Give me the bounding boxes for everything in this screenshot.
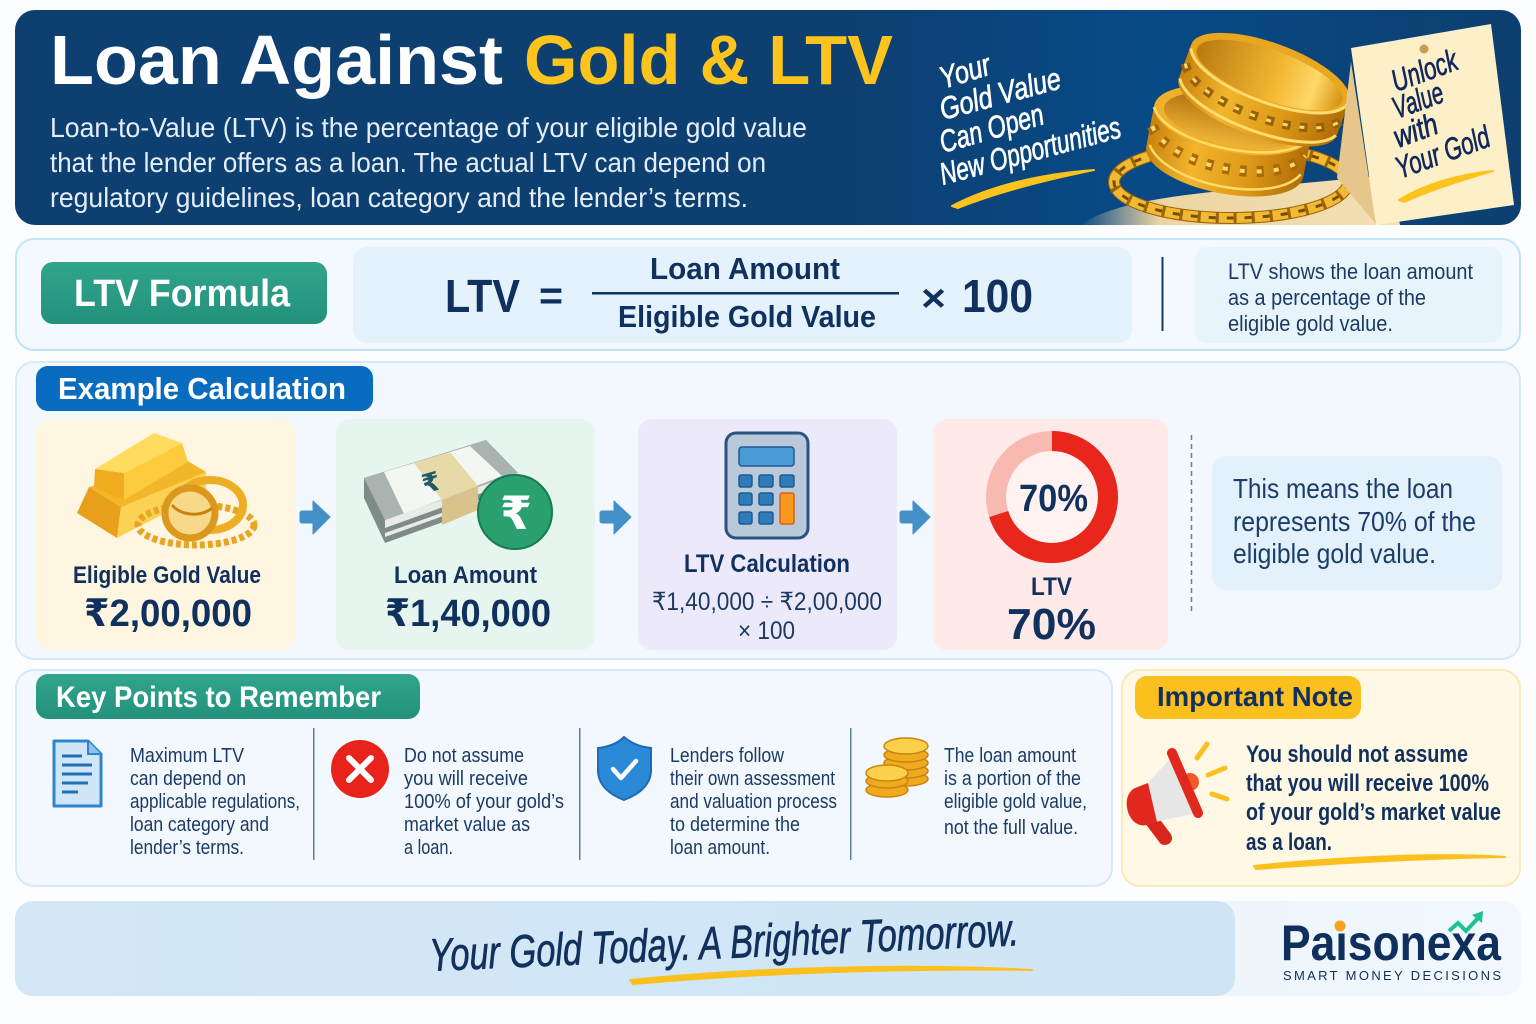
formula equation: Eligible Gold Value <box>618 299 876 334</box>
handwritten tagline: Can Open <box>935 97 1048 160</box>
handwritten tagline: Gold Value <box>936 61 1065 127</box>
panel: key points <box>16 670 1112 886</box>
important note text: as a loan. <box>1246 829 1332 856</box>
header description: that the lender offers as a loan. The actual LTV can depend on <box>50 147 766 178</box>
key point: portion of value <box>866 738 1087 839</box>
card: LTV calculation: LTV Calculation <box>684 550 850 578</box>
key point: portion of value: eligible gold value, <box>944 791 1087 813</box>
donut chart: 70 percent: 70% <box>1019 478 1088 520</box>
sticky note: Value <box>1387 75 1448 126</box>
important note heading <box>1135 676 1361 719</box>
key points heading: Key Points to Remember <box>56 681 381 714</box>
formula explanation <box>1195 247 1502 343</box>
header description: Loan-to-Value (LTV) is the percentage of your eligible gold value <box>50 112 807 143</box>
logo: Paisonexa: SMART MONEY DECISIONS <box>1283 968 1501 983</box>
key point: regulations: can depend on <box>130 768 246 790</box>
icon: megaphone <box>1127 744 1227 838</box>
handwritten tagline <box>935 47 1124 208</box>
panel: important note <box>1122 670 1520 886</box>
key point: lender assessment: Lenders follow <box>670 745 784 767</box>
important note text <box>1246 741 1501 856</box>
card: eligible gold value <box>36 419 295 650</box>
formula equation: × <box>921 278 946 320</box>
card: LTV result: 70% <box>1007 600 1096 649</box>
card: LTV result <box>933 419 1168 650</box>
panel: example calculation <box>16 362 1520 659</box>
card: eligible gold value: Eligible Gold Value <box>73 562 261 589</box>
sticky note: Your Gold <box>1390 119 1496 186</box>
key point: do not assume: a loan. <box>404 837 453 859</box>
example explanation <box>1212 456 1502 590</box>
arrow <box>900 501 930 534</box>
formula explanation: as a percentage of the <box>1228 285 1426 310</box>
key point: regulations: Maximum LTV <box>130 745 245 767</box>
key point: do not assume: you will receive <box>404 768 528 790</box>
title <box>50 21 893 99</box>
key point: lender assessment: and valuation process <box>670 791 837 813</box>
icon: cash stack with rupee coin <box>364 440 552 549</box>
card: loan amount: Loan Amount <box>394 562 537 589</box>
key points heading <box>36 674 420 719</box>
key point: do not assume: Do not assume <box>404 745 524 767</box>
key point: regulations: loan category and <box>130 814 269 836</box>
important note text: that you will receive 100% <box>1246 770 1489 797</box>
icon: cash stack with rupee coin: ₹ <box>500 487 532 539</box>
card: LTV calculation <box>638 419 897 650</box>
example explanation: represents 70% of the <box>1233 506 1476 537</box>
icon: calculator <box>726 433 808 538</box>
card: LTV calculation: × 100 <box>738 617 795 645</box>
donut chart: 70 percent <box>996 441 1108 553</box>
icon: gold bars and jewellery <box>77 433 254 545</box>
formula explanation: LTV shows the loan amount <box>1228 259 1473 284</box>
key point: do not assume <box>331 740 564 859</box>
card: LTV result: LTV <box>1031 573 1072 601</box>
key point: do not assume: 100% of your gold’s <box>404 791 564 813</box>
handwritten tagline: Your <box>935 47 996 96</box>
key point: regulations: lender’s terms. <box>130 837 244 859</box>
important note text: You should not assume <box>1246 741 1468 768</box>
card: loan amount: ₹1,40,000 <box>385 593 551 635</box>
key point: lender assessment <box>598 737 837 859</box>
example explanation: eligible gold value. <box>1233 538 1436 569</box>
key point: portion of value: The loan amount <box>944 745 1076 767</box>
example explanation: This means the loan <box>1233 473 1453 504</box>
icon: gold coins <box>866 738 928 797</box>
header description: regulatory guidelines, loan category and the lender’s terms. <box>50 182 748 213</box>
panel: LTV formula <box>16 239 1520 350</box>
formula equation: LTV <box>445 270 520 322</box>
logo: Paisonexa: Paisonexa <box>1281 915 1502 971</box>
key point: regulations: applicable regulations, <box>130 791 300 813</box>
formula equation: = <box>539 274 563 318</box>
key point: portion of value: not the full value. <box>944 817 1078 839</box>
sticky note <box>1337 24 1514 225</box>
icon: document <box>54 741 101 806</box>
example calculation heading <box>36 366 373 411</box>
key point: lender assessment: loan amount. <box>670 837 770 859</box>
illustration: gold bangles and chain <box>1080 16 1400 225</box>
LTV formula badge <box>41 262 327 324</box>
arrow <box>600 501 631 534</box>
formula equation: 100 <box>962 270 1033 322</box>
formula equation: Loan Amount <box>650 251 840 286</box>
key point: portion of value: is a portion of the <box>944 768 1081 790</box>
handwritten tagline: New Opportunities <box>936 110 1124 192</box>
panel: header banner <box>15 10 1521 225</box>
formula equation <box>353 247 1132 343</box>
card: loan amount <box>336 419 595 650</box>
icon: red cross <box>331 740 389 798</box>
title: Gold & LTV <box>524 21 893 99</box>
LTV formula badge: LTV Formula <box>74 273 291 315</box>
chain <box>1114 146 1348 218</box>
formula explanation: eligible gold value. <box>1228 311 1393 336</box>
card: eligible gold value: ₹2,00,000 <box>84 593 252 635</box>
key point: regulations <box>54 741 300 859</box>
icon: cash stack with rupee coin: ₹ <box>418 466 444 499</box>
panel: footer <box>15 901 1521 996</box>
arrow <box>300 501 330 534</box>
key point: do not assume: market value as <box>404 814 530 836</box>
important note heading: Important Note <box>1157 681 1353 712</box>
key point: lender assessment: their own assessment <box>670 768 835 790</box>
example calculation heading: Example Calculation <box>58 371 346 406</box>
icon: shield with check <box>598 737 651 800</box>
header description <box>50 112 807 213</box>
sticky note: with <box>1388 106 1443 155</box>
footer slogan: Your Gold Today. A Brighter Tomorrow. <box>428 903 1020 981</box>
key point: lender assessment: to determine the <box>670 814 800 836</box>
title: Loan Against <box>50 21 503 99</box>
card: LTV calculation: ₹1,40,000 ÷ ₹2,00,000 <box>652 588 882 616</box>
sticky note: Unlock <box>1386 42 1463 99</box>
